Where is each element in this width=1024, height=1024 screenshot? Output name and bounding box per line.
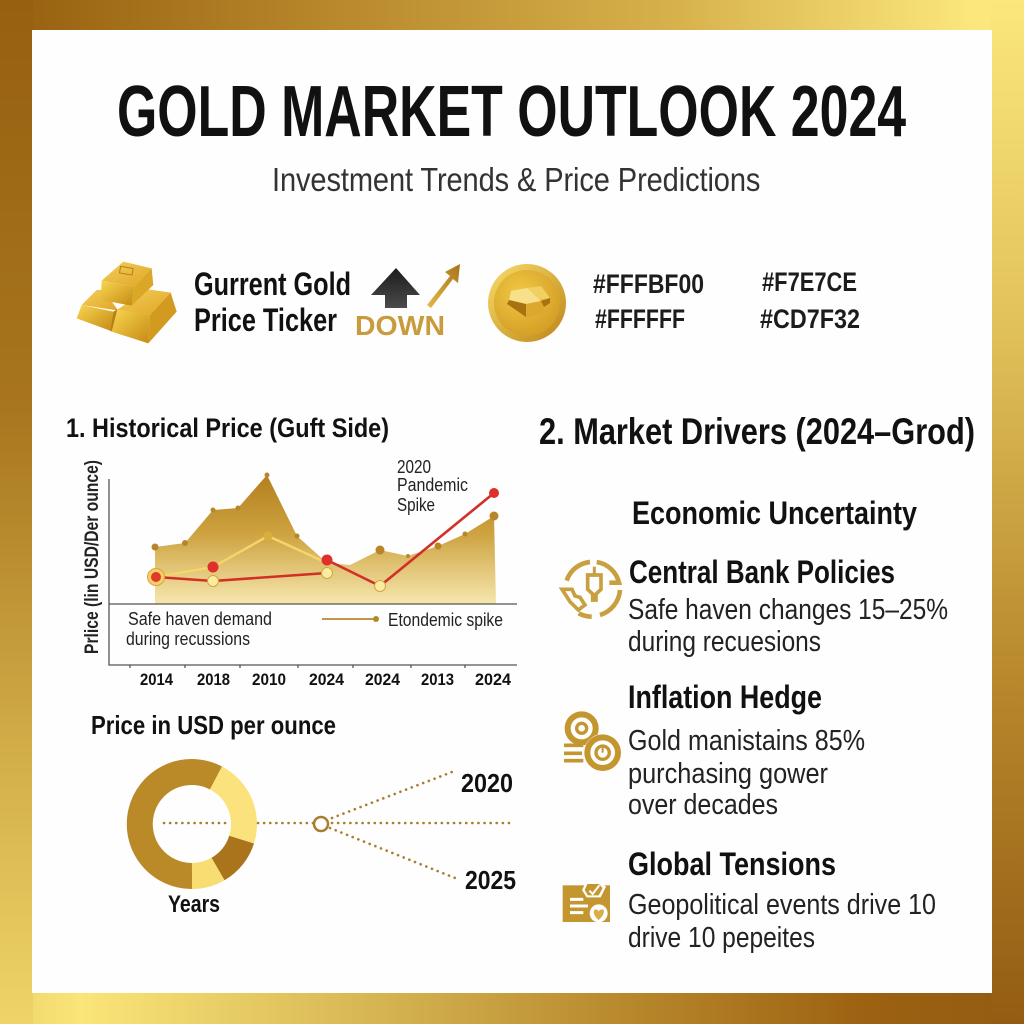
colour codes: #CD7F32 — [760, 304, 860, 334]
annotation: pandemic spike — [397, 457, 468, 515]
note: safe haven demand: Safe haven demand — [128, 609, 272, 629]
colour codes: #FFFBF00 — [593, 269, 704, 299]
driver text: Safe haven changes 15–25% — [628, 594, 948, 626]
colour codes — [593, 267, 860, 334]
driver text — [628, 594, 948, 658]
icon: document with check and heart — [563, 882, 610, 922]
chart: area and line chart — [82, 457, 517, 689]
annotation: pandemic spike: Spike — [397, 495, 435, 515]
panel: historical price — [66, 413, 517, 689]
icon: gold bars — [77, 262, 177, 343]
panel: market drivers — [539, 411, 975, 954]
connector node — [314, 817, 328, 831]
donut chart — [140, 772, 244, 876]
note: safe haven demand: during recussions — [126, 629, 250, 649]
ticker label: Gurrent Gold — [194, 266, 351, 302]
icon: central bank — [562, 562, 620, 617]
title: GOLD MARKET OUTLOOK 2024 — [117, 72, 906, 152]
colour codes: #FFFFFF — [595, 304, 685, 334]
icon: black up arrow — [371, 268, 420, 308]
label: 2025: 2025 — [465, 865, 516, 895]
x axis years: 2013 — [421, 670, 454, 689]
colour codes: #F7E7CE — [762, 267, 857, 297]
x axis years: 2014 — [140, 670, 173, 689]
driver text: during recuesions — [628, 626, 821, 658]
x axis years: 2024 — [309, 670, 344, 689]
area markers — [152, 472, 498, 558]
driver title: Inflation Hedge — [628, 679, 822, 715]
driver: central bank policies — [562, 554, 948, 658]
driver text — [628, 889, 936, 954]
icon: gold coin — [488, 264, 566, 342]
driver text: Gold manistains 85% — [628, 725, 865, 757]
driver text — [628, 725, 865, 821]
x axis years: 2010 — [252, 670, 286, 689]
annotation: pandemic spike: Pandemic — [397, 475, 468, 495]
note: safe haven demand — [126, 609, 272, 649]
x axis years: 2018 — [197, 670, 230, 689]
ticker label: Price Ticker — [194, 302, 337, 338]
label: 2020: 2020 — [461, 768, 513, 798]
label: years: Years — [168, 891, 220, 918]
driver text: Geopolitical events drive 10 — [628, 889, 936, 921]
x axis years — [140, 670, 512, 689]
subheading: economic uncertainty: Economic Uncertainty — [632, 495, 917, 531]
red line — [156, 493, 494, 586]
dotted connector lines — [164, 772, 513, 878]
legend: endemic spike: Etondemic spike — [388, 610, 503, 630]
gold area series — [155, 475, 496, 604]
x axis years: 2024 — [365, 670, 400, 689]
driver text: drive 10 pepeites — [628, 922, 815, 954]
data points — [148, 488, 499, 592]
legend: endemic spike — [322, 610, 503, 630]
ticker label — [194, 266, 351, 338]
panel: price donut — [91, 710, 516, 918]
panel: price ticker row — [77, 262, 860, 343]
y axis label: Prlice (lin USD/Der ounce) — [82, 460, 103, 654]
axes — [109, 479, 517, 668]
driver title: Global Tensions — [628, 846, 836, 882]
heading: price per ounce: Price in USD per ounce — [91, 710, 336, 740]
x axis years: 2024 — [475, 670, 512, 689]
annotation: pandemic spike: 2020 — [397, 457, 431, 477]
pale gold line — [156, 536, 327, 577]
driver text: purchasing gower — [628, 758, 828, 790]
driver: inflation hedge — [564, 679, 865, 821]
driver: global tensions — [563, 846, 936, 954]
icon: gold rising arrow — [427, 264, 460, 308]
driver text: over decades — [628, 789, 778, 821]
driver title: Central Bank Policies — [629, 554, 895, 590]
subtitle: Investment Trends & Price Predictions — [272, 161, 760, 198]
heading: historical price: 1. Historical Price (Guft Side) — [66, 413, 389, 443]
down label: DOWN — [355, 310, 445, 341]
icon: coins and clock — [564, 714, 620, 770]
